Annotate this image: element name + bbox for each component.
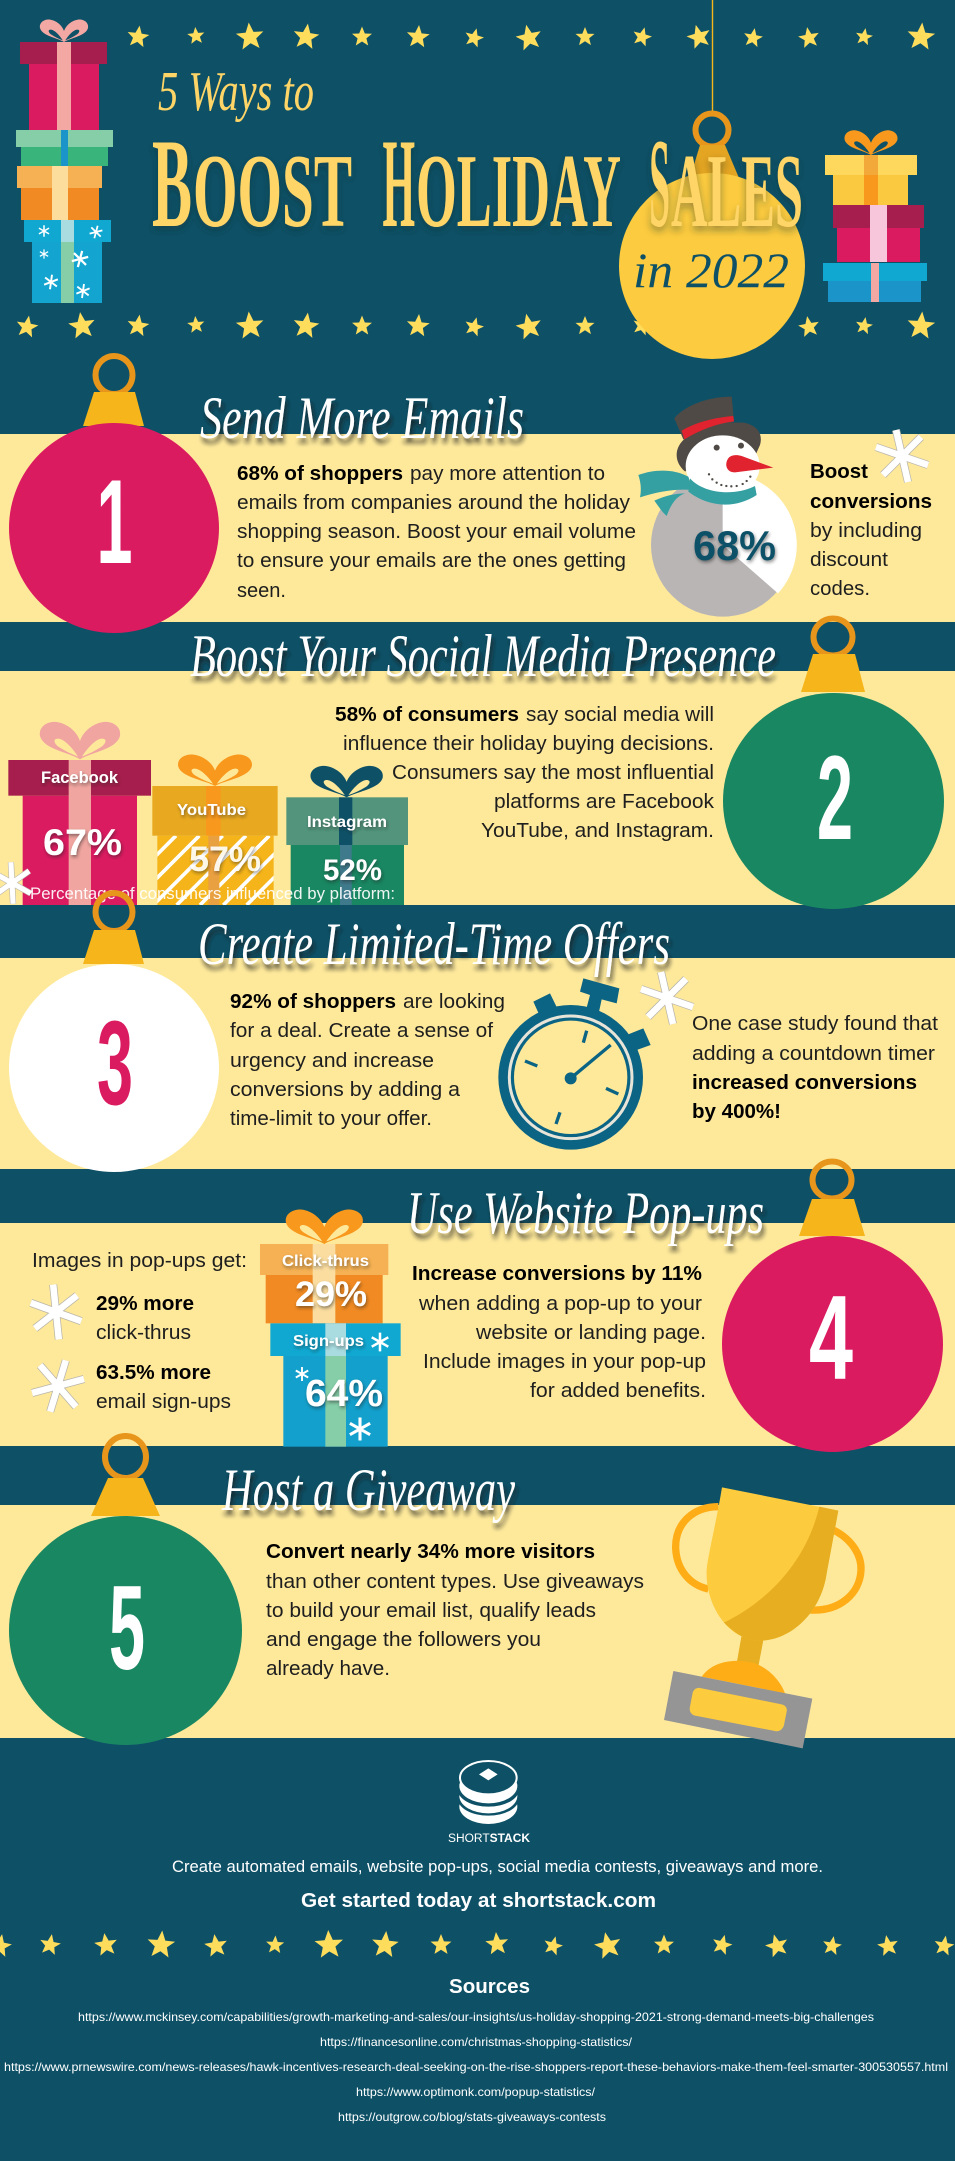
chart: gift stack click-thrus and sign-ups: Click-thrus [282, 1253, 369, 1270]
heading: host a giveaway: Host a Giveaway [221, 1457, 515, 1523]
text block: deals: 92% of shoppers [230, 991, 396, 1013]
gift: instagram: 52% [323, 854, 382, 887]
panel: section 3 [9, 893, 938, 1172]
text block: social stats: influence their holiday buying decisions. [343, 733, 714, 755]
text block: pop-up conversions: for added benefits. [530, 1380, 706, 1402]
ornament 2: 2 [817, 731, 853, 865]
text block: images in pop-ups: Images in pop-ups get: [32, 1250, 247, 1272]
text block: countdown timer: by 400%! [692, 1101, 781, 1123]
logo: shortstack: SHORTSTACK [448, 1833, 531, 1845]
text block: boost conversions: conversions [810, 491, 932, 513]
icon: left gift stack [16, 20, 113, 303]
text block: giveaways: already have. [266, 1658, 390, 1680]
text block: images in pop-ups: email sign-ups [96, 1391, 231, 1413]
text block: deals: for a deal. Create a sense of [230, 1020, 493, 1042]
text block: deals: are looking [403, 991, 505, 1013]
gift: facebook: 67% [43, 822, 122, 863]
top star row [126, 21, 936, 51]
gift: instagram [286, 766, 408, 905]
text block: email stats: pay more attention to [410, 463, 605, 485]
text block: pop-up conversions [412, 1263, 706, 1402]
text: ALES [671, 132, 803, 249]
gift: youtube: YouTube [177, 802, 246, 819]
heading: create limited-time offers: Create Limited-Time Offers [198, 911, 670, 977]
text block: social stats: Consumers say the most influential [392, 762, 714, 784]
text block: pop-up conversions: Include images in your pop-up [423, 1351, 706, 1373]
title: B [152, 114, 192, 254]
text block: deals: urgency and increase [230, 1050, 434, 1072]
text block: images in pop-ups: 63.5% more [96, 1362, 211, 1384]
title: OLIDAY [416, 132, 621, 249]
text block: social stats: say social media will [526, 704, 714, 726]
panel: section 1 [9, 356, 932, 633]
text block: countdown timer [692, 1013, 938, 1123]
title: OOST [193, 132, 352, 249]
text block: images in pop-ups [21, 1250, 247, 1422]
icon: header ornament [619, 0, 805, 359]
text block: giveaways: than other content types. Use giveaways [266, 1571, 644, 1593]
ornament 3 [9, 893, 219, 1172]
text block: social stats: platforms are Facebook [494, 791, 715, 813]
ornament 5: 5 [109, 1561, 145, 1695]
logo: shortstack [448, 1761, 531, 1845]
text block: boost conversions: Boost [810, 461, 868, 483]
icon: snowflake 2 [0, 860, 35, 906]
text block: email stats: 68% of shoppers [237, 463, 403, 485]
text block: giveaways: Convert nearly 34% more visitors [266, 1541, 595, 1563]
text block: source urls: https://financesonline.com/christmas-shopping-statistics/ [320, 2035, 633, 2049]
text block: boost conversions: discount [810, 549, 888, 571]
text block: email stats: to ensure your emails are the ones getting [237, 550, 626, 572]
icon: stopwatch [498, 978, 651, 1150]
cream bands [0, 434, 955, 1738]
text block: pop-up conversions: Increase conversions by 11% [412, 1263, 702, 1285]
text block: email stats [237, 463, 636, 602]
chart: gifts by platform [8, 722, 408, 905]
ornament 4 [722, 1162, 943, 1452]
text block: giveaways: to build your email list, qualify leads [266, 1600, 596, 1622]
text block: source urls: https://www.mckinsey.com/capabilities/growth-marketing-and-sales/our-insights/us-holiday-shopping-2021-strong-demand-meets-big-challenges [78, 2010, 874, 2024]
text block: images in pop-ups: click-thrus [96, 1322, 191, 1344]
gift: facebook: Facebook [41, 768, 119, 787]
icon: snowman pie chart [638, 397, 797, 617]
text block: source urls: https://www.optimonk.com/popup-statistics/ [356, 2085, 596, 2099]
text block: boost conversions: by including [810, 520, 922, 542]
heading: send more emails: Send More Emails [200, 385, 524, 451]
gift: youtube: 57% [189, 840, 261, 879]
icon: right gift stack [823, 130, 927, 302]
text block: source urls [4, 2010, 948, 2124]
title: H [372, 114, 415, 254]
ornament 2 [723, 618, 944, 909]
ornament 3: 3 [97, 996, 133, 1130]
text block: countdown timer: adding a countdown timer [692, 1043, 935, 1065]
text block: giveaways: and engage the followers you [266, 1629, 541, 1651]
text block: boost conversions: codes. [810, 578, 870, 600]
chart: gift stack click-thrus and sign-ups [260, 1210, 401, 1447]
chart caption: Percentage of consumers influenced by platform: [30, 884, 395, 903]
ornament 1 [9, 356, 219, 633]
gift: facebook [8, 722, 151, 905]
text block: giveaways [266, 1541, 644, 1680]
icon: trophy [664, 1487, 861, 1748]
text block: social stats [335, 704, 715, 842]
text block: images in pop-ups: 29% more [96, 1293, 194, 1315]
subtitle: 5 Ways to: 5 Ways to [158, 61, 314, 123]
text block: source urls: https://www.prnewswire.com/news-releases/hawk-incentives-research-deal-seeking-on-the-rise-shoppers-report-these-behaviors-make-them-feel-smarter-300530557.html [4, 2060, 948, 2074]
text block: deals: time-limit to your offer. [230, 1108, 432, 1130]
text block: countdown timer: One case study found that [692, 1013, 938, 1035]
heading: sources: Sources [449, 1976, 530, 1998]
icon: snowflake 3 [641, 972, 693, 1024]
ornament 4: 4 [809, 1271, 853, 1405]
footer star row [0, 1929, 955, 1960]
text: get started: Get started today at shortstack.com [301, 1890, 656, 1912]
icon: snowflake 4 [21, 1277, 91, 1347]
text block: email stats: emails from companies around the holiday [237, 492, 630, 514]
text block: pop-up conversions: website or landing page. [475, 1322, 706, 1344]
heading: use website pop-ups: Use Website Pop-ups [407, 1180, 764, 1246]
text block: email stats: shopping season. Boost your email volume [237, 521, 636, 543]
text block: deals [230, 991, 505, 1130]
gift: youtube [83, 755, 316, 905]
panel: section 2 [0, 618, 944, 909]
chart: gift stack click-thrus and sign-ups: 64% [305, 1373, 383, 1415]
panel: section 5 [9, 1436, 861, 1748]
text: in 2022: in 2022 [633, 242, 789, 298]
chart: gift stack click-thrus and sign-ups: 29% [295, 1275, 367, 1314]
ornament 1: 1 [96, 455, 132, 589]
text block: email stats: seen. [237, 580, 286, 602]
text block: source urls: https://outgrow.co/blog/stats-giveaways-contests [338, 2110, 606, 2124]
text block: boost conversions [810, 461, 932, 600]
icon: snowman pie chart: 68% [693, 522, 776, 569]
chart: gift stack click-thrus and sign-ups: Sign-ups [293, 1333, 364, 1350]
text block: social stats: 58% of consumers [335, 704, 519, 726]
panel: section 4 [21, 1162, 943, 1452]
icon: snowflake 5 [22, 1350, 94, 1422]
ornament 5 [9, 1436, 242, 1745]
text block: pop-up conversions: when adding a pop-up to your [418, 1293, 702, 1315]
gift: instagram: Instagram [307, 814, 387, 831]
text block: countdown timer: increased conversions [692, 1072, 917, 1094]
text: call to action: Create automated emails, website pop-ups, social media contests, giveaways and more. [172, 1858, 823, 1876]
text block: deals: conversions by adding a [230, 1079, 461, 1101]
title: S [640, 114, 670, 254]
bottom header star row [15, 310, 936, 340]
text block: social stats: YouTube, and Instagram. [481, 820, 714, 842]
icon: snowflake 1 [876, 430, 928, 482]
